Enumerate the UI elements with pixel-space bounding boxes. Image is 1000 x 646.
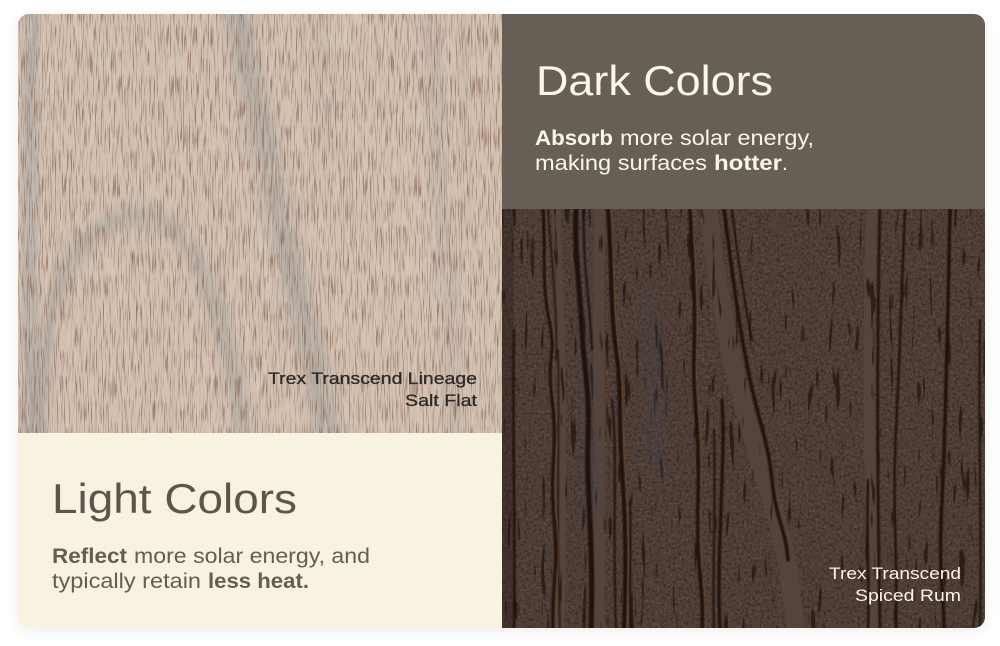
panel: light colors bbox=[18, 433, 502, 628]
caption: Spiced Rum product: Trex Transcend bbox=[829, 564, 961, 583]
panel: dark colors bbox=[502, 14, 985, 209]
blue-grey tint bbox=[582, 205, 656, 520]
text: light colors description: more solar energy, and bbox=[134, 545, 370, 568]
text: dark colors description: making surfaces bbox=[535, 152, 707, 175]
text: light colors description: less heat. bbox=[208, 570, 309, 593]
panel: dark wood texture bbox=[502, 205, 985, 630]
orange groove highlights bbox=[546, 210, 705, 630]
caption: Salt Flat product: Salt Flat bbox=[405, 391, 477, 410]
text: light colors description: Reflect bbox=[52, 545, 127, 568]
text: dark colors description: Absorb bbox=[535, 127, 613, 150]
smooth wood bands bbox=[556, 205, 874, 630]
text: dark colors description: more solar energy, bbox=[620, 127, 814, 150]
caption: Spiced Rum product bbox=[829, 564, 961, 605]
text: dark colors description: . bbox=[782, 152, 788, 175]
heading: light colors: Light Colors bbox=[52, 475, 297, 522]
caption: Salt Flat product bbox=[268, 372, 477, 406]
text: dark colors description bbox=[535, 127, 814, 175]
grey-blue grain streaks bbox=[27, 0, 467, 446]
caption: Salt Flat product: Trex Transcend Lineage bbox=[268, 369, 477, 388]
panel: light wood texture bbox=[18, 0, 502, 446]
dark grooves bbox=[513, 210, 981, 630]
text: dark colors description: hotter bbox=[714, 152, 782, 175]
text: light colors description bbox=[52, 545, 370, 593]
heading: dark colors: Dark Colors bbox=[536, 57, 773, 104]
text: light colors description: typically retain bbox=[52, 570, 201, 593]
caption: Spiced Rum product: Spiced Rum bbox=[855, 586, 961, 605]
